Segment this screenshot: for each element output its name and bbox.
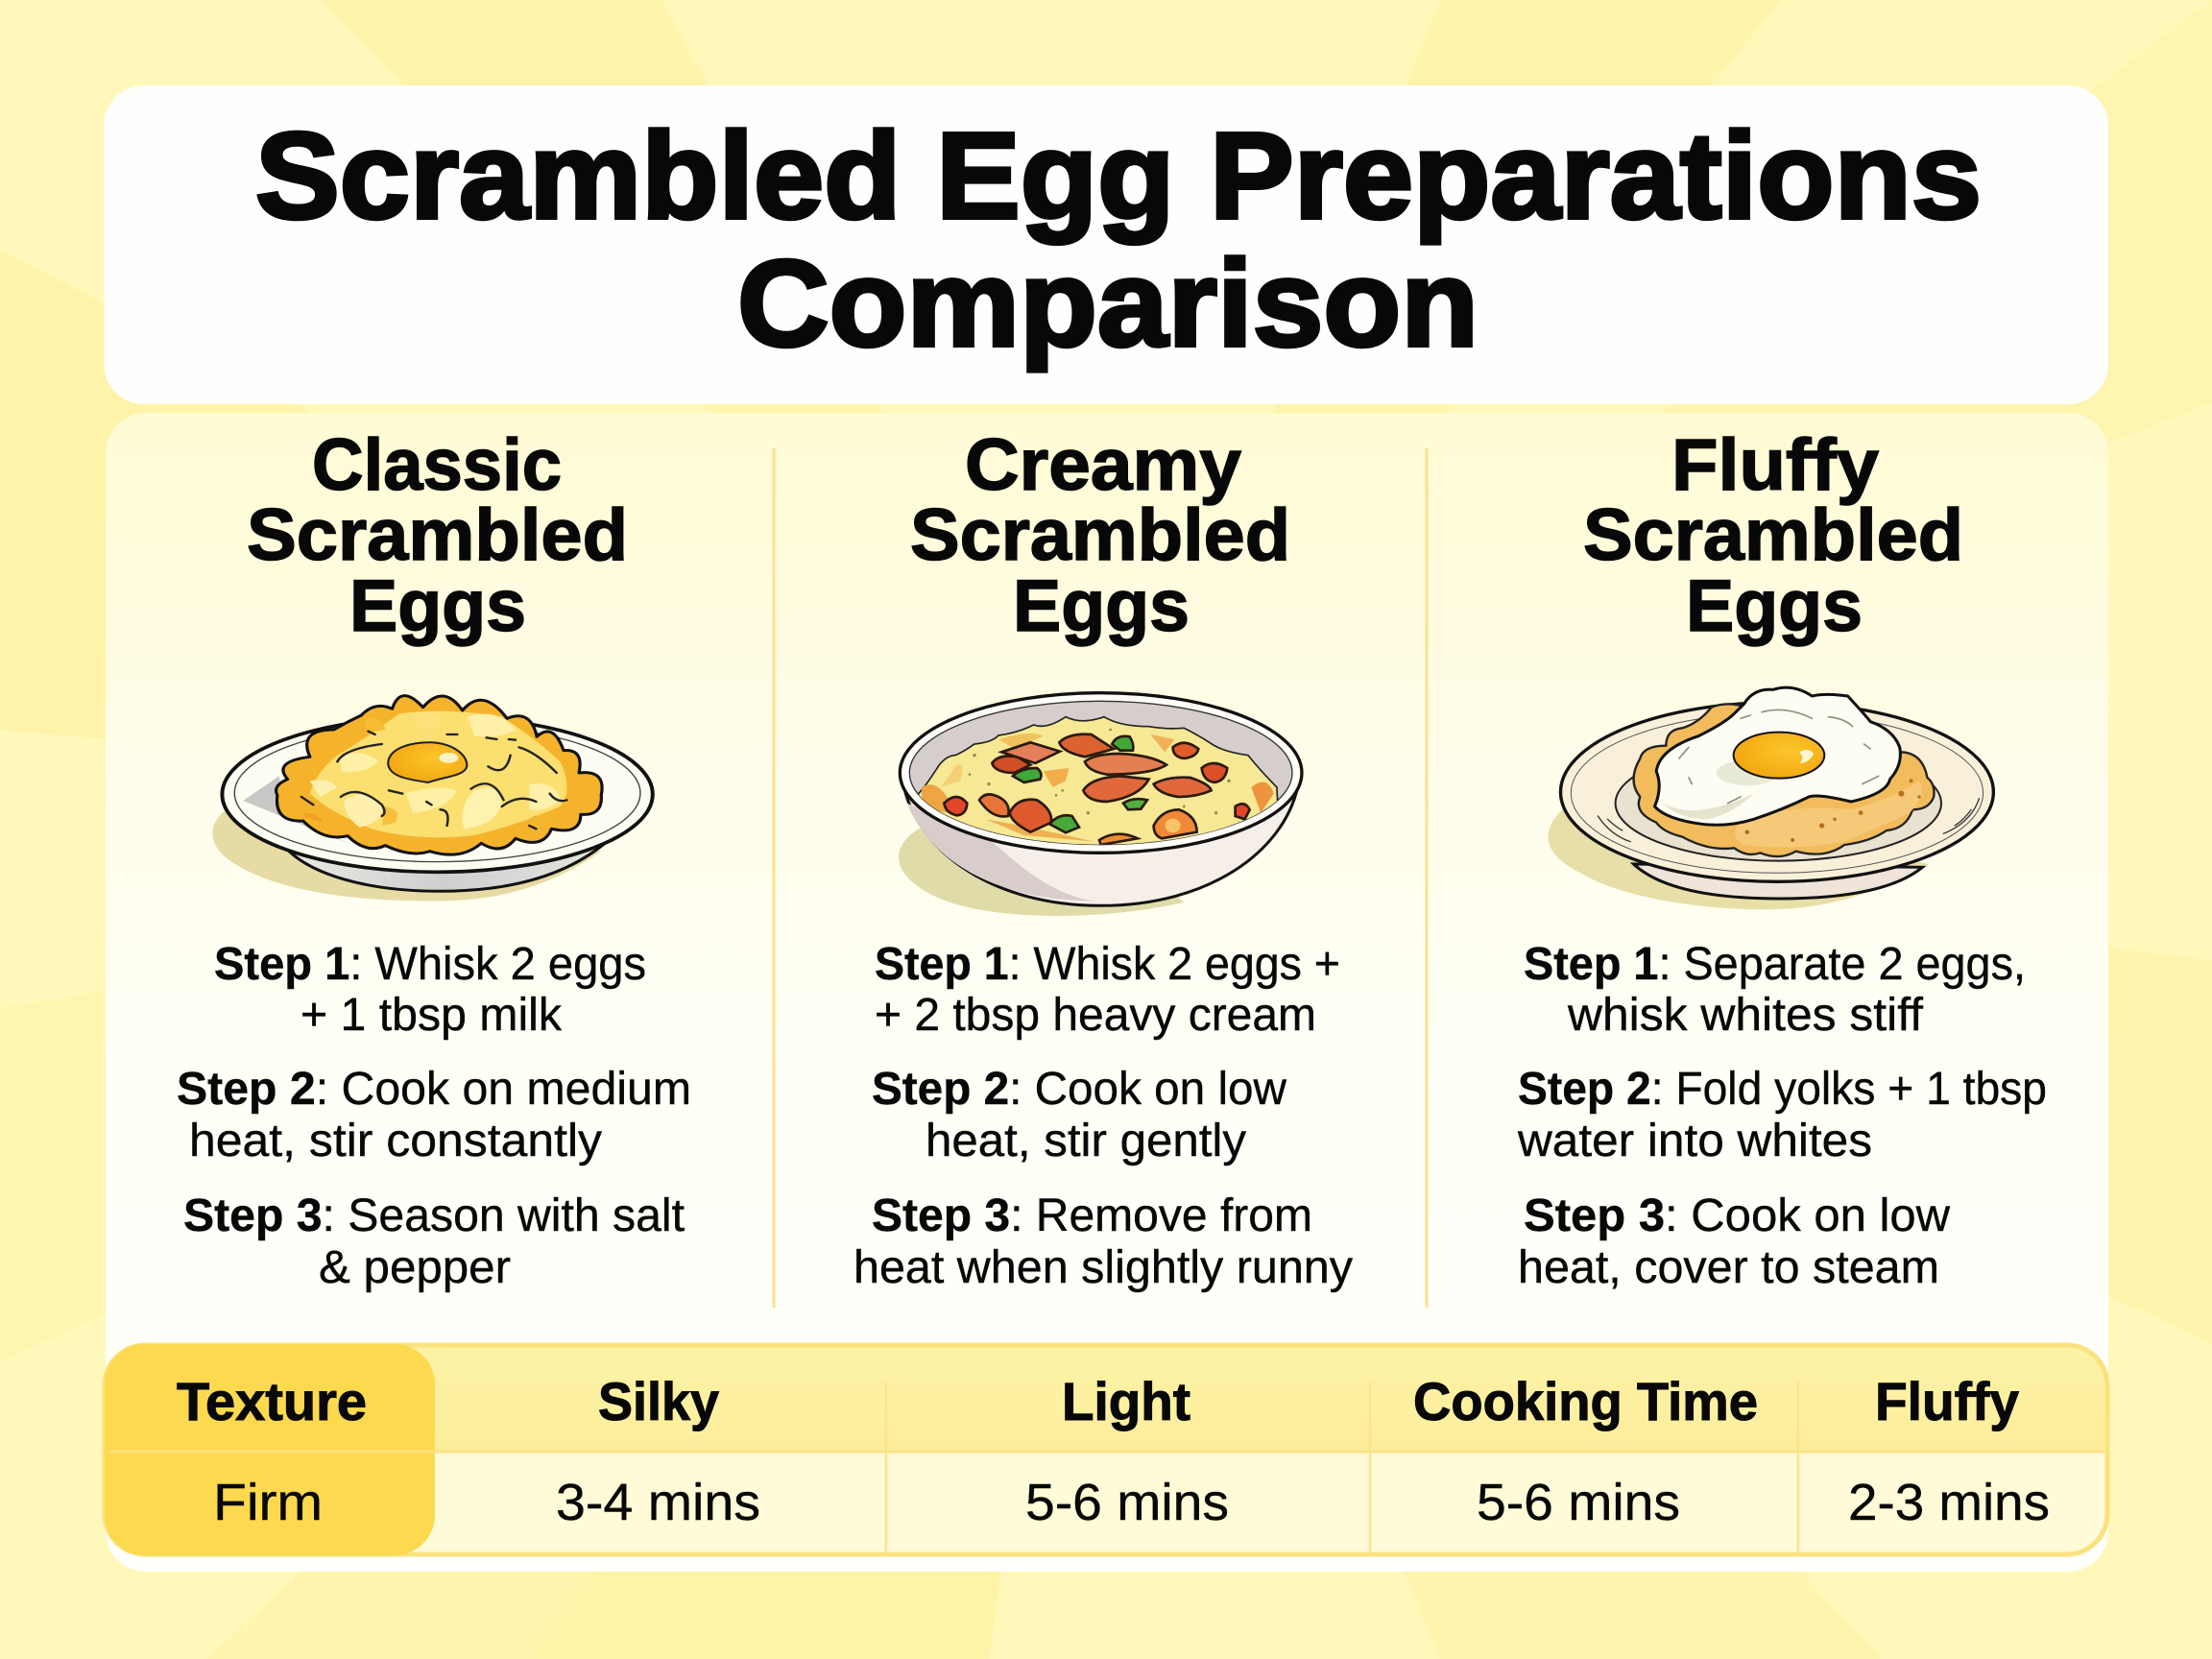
- yolk: [388, 742, 467, 782]
- steps: classic: Step 2: Cook on medium: [177, 1064, 691, 1115]
- steps: classic: Step 3: Season with salt: [183, 1190, 685, 1241]
- table header row: Texture: [177, 1371, 367, 1431]
- table value row: 2-3 mins: [1848, 1474, 2050, 1531]
- steps: creamy: heat when slightly runny: [854, 1242, 1353, 1293]
- column dividers: [774, 448, 1427, 1308]
- steps: fluffy: Step 3: Cook on low: [1524, 1190, 1950, 1241]
- illustration: classic scrambled eggs on plate: [212, 696, 653, 901]
- title: Comparison: [737, 235, 1479, 373]
- steps: creamy: heat, stir gently: [926, 1116, 1246, 1166]
- steps: creamy: [854, 939, 1353, 1293]
- table header row: Cooking Time: [1413, 1371, 1758, 1431]
- illustration: fluffy eggs with fried egg on plate: [1548, 687, 1993, 909]
- table header row: Light: [1062, 1371, 1190, 1431]
- heading: classic: Scrambled: [247, 494, 628, 576]
- steps: classic: & pepper: [319, 1242, 511, 1293]
- steps: fluffy: [1517, 939, 2047, 1293]
- main panel: [106, 413, 2108, 1572]
- table row label cell: [105, 1344, 435, 1555]
- steps: fluffy: whisk whites stiff: [1567, 990, 1924, 1041]
- heading: creamy: Eggs: [1013, 565, 1190, 647]
- heading: classic: Classic: [312, 424, 562, 506]
- table header row: Silky: [598, 1371, 719, 1431]
- steps: creamy: Step 3: Remove from: [872, 1190, 1312, 1241]
- column: creamy: [854, 424, 1353, 1293]
- table value row: [213, 1474, 2050, 1531]
- table value row: 5-6 mins: [1477, 1474, 1680, 1531]
- steps: fluffy: heat, cover to steam: [1518, 1242, 1939, 1293]
- steps: creamy: Step 2: Cook on low: [872, 1064, 1286, 1115]
- title: [255, 108, 1982, 373]
- heading: fluffy: Scrambled: [1583, 494, 1963, 576]
- title: Scrambled Egg Preparations: [255, 108, 1982, 245]
- heading: creamy: Scrambled: [910, 494, 1290, 576]
- steps: fluffy: Step 1: Separate 2 eggs,: [1524, 939, 2026, 990]
- heading: fluffy: Fluffy: [1671, 424, 1879, 506]
- illustration: creamy scrambled eggs in bowl: [899, 693, 1302, 916]
- heading: classic: Eggs: [349, 565, 526, 647]
- column: fluffy: [1517, 424, 2047, 1293]
- steps: fluffy: water into whites: [1517, 1116, 1872, 1166]
- table value row: 3-4 mins: [556, 1474, 760, 1531]
- yolk: [1734, 733, 1824, 779]
- heading: creamy: Creamy: [965, 424, 1241, 506]
- table value row: Firm: [213, 1474, 323, 1531]
- steps: creamy: + 2 tbsp heavy cream: [875, 990, 1316, 1041]
- steps: creamy: Step 1: Whisk 2 eggs +: [875, 939, 1340, 990]
- heading: classic: [247, 424, 628, 647]
- steps: classic: + 1 tbsp milk: [301, 990, 563, 1041]
- title panel: [104, 85, 2108, 404]
- heading: fluffy: [1583, 424, 1963, 647]
- table value row: 5-6 mins: [1025, 1474, 1229, 1531]
- table header row: Fluffy: [1875, 1371, 2019, 1431]
- steps: classic: Step 1: Whisk 2 eggs: [214, 939, 646, 990]
- steps: classic: heat, stir constantly: [189, 1116, 602, 1166]
- heading: fluffy: Eggs: [1686, 565, 1863, 647]
- table header row: [177, 1371, 2019, 1431]
- steps: classic: [177, 939, 691, 1293]
- column: classic: [177, 424, 691, 1293]
- comparison table: [105, 1344, 2107, 1555]
- steps: fluffy: Step 2: Fold yolks + 1 tbsp: [1518, 1064, 2047, 1115]
- heading: creamy: [910, 424, 1290, 647]
